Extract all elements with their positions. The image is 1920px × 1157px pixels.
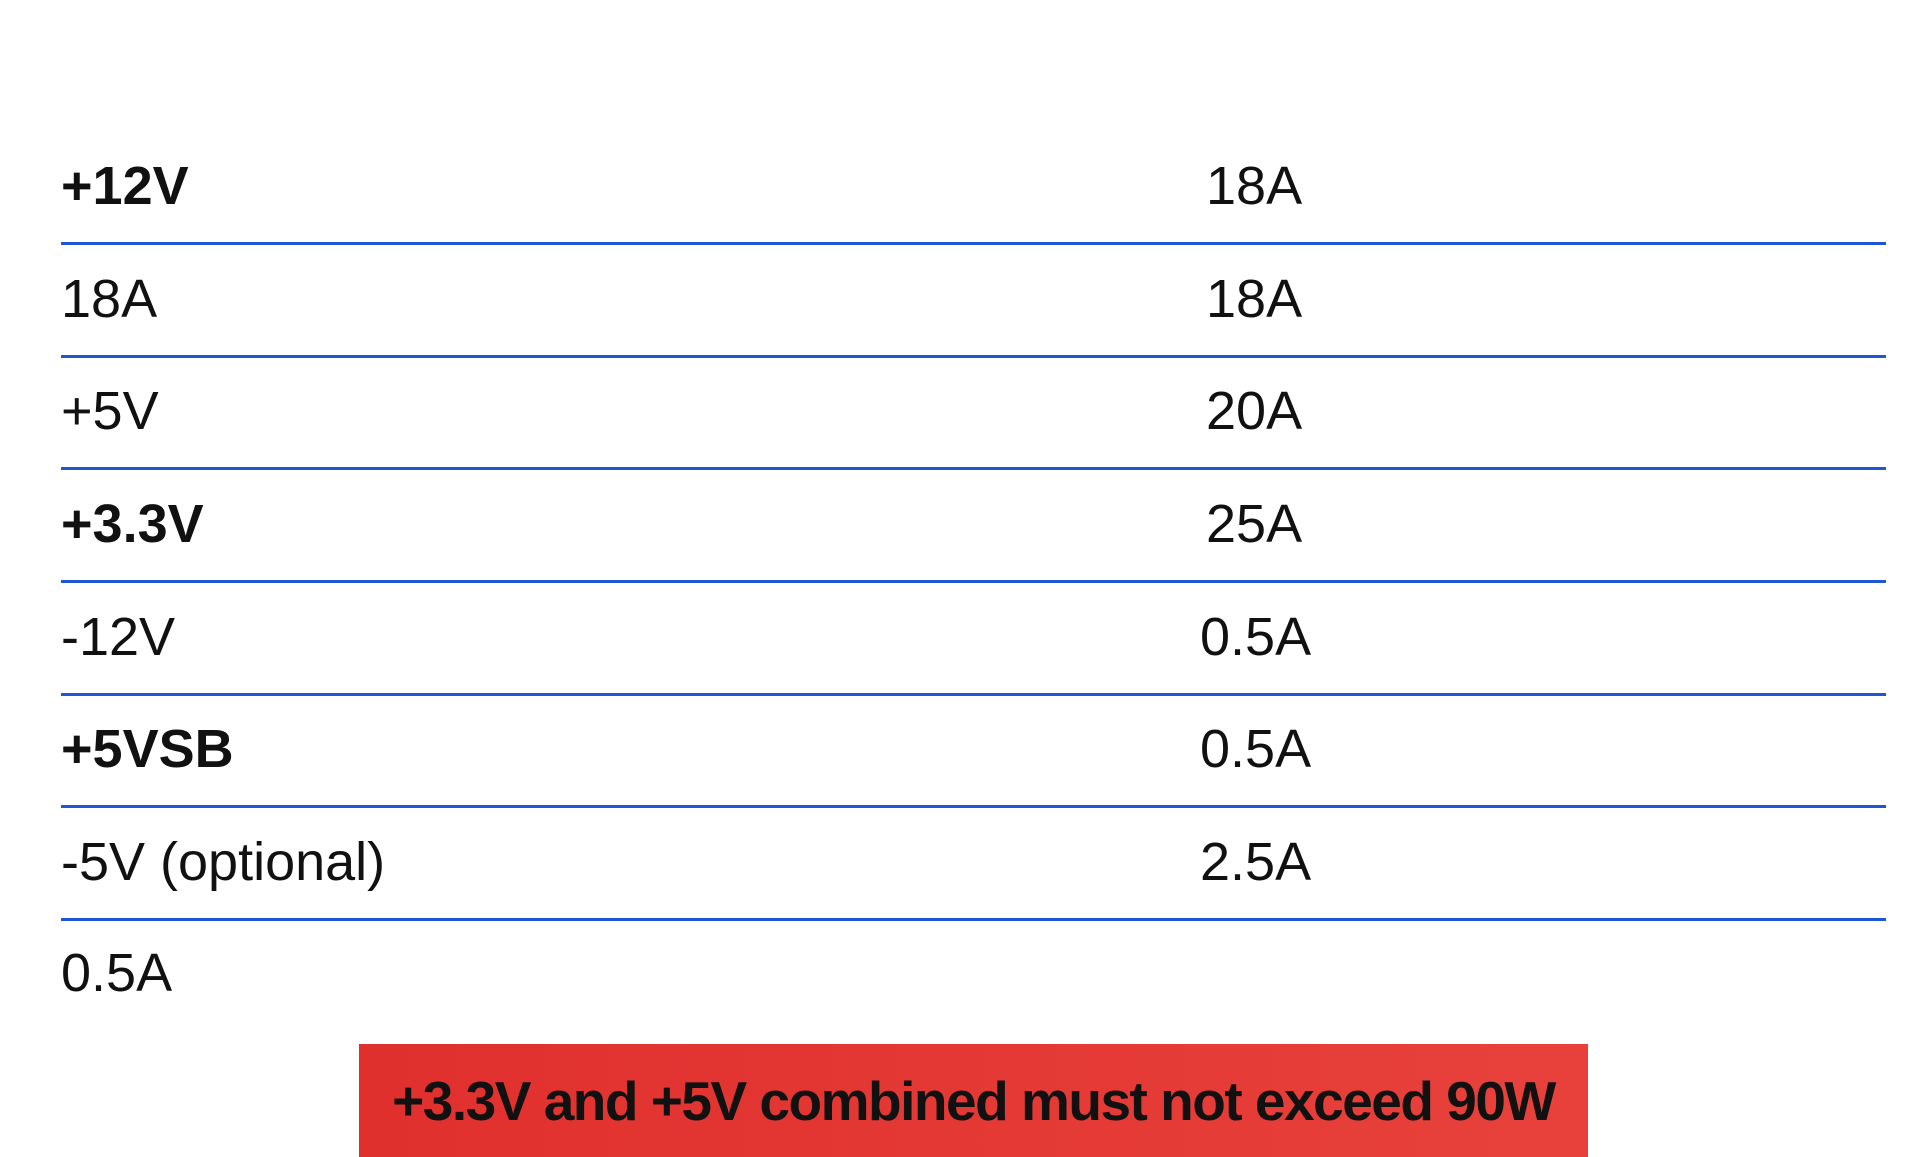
row labels: 20A bbox=[1206, 381, 1302, 441]
row labels: 25A bbox=[1206, 494, 1302, 554]
row: -5V optional: -5V (optional) bbox=[61, 832, 385, 892]
row labels: 18A bbox=[1206, 156, 1302, 216]
row: +5V: +5V bbox=[61, 381, 159, 441]
row: -12V: -12V bbox=[61, 607, 175, 667]
row: +12V: +12V bbox=[61, 156, 189, 216]
row labels: 0.5A bbox=[1200, 607, 1311, 667]
callout: warning banner: +3.3V and +5V combined must not exceed 90W bbox=[392, 1070, 1555, 1132]
row: 18A: 18A bbox=[61, 269, 157, 329]
row labels: 18A bbox=[1206, 269, 1302, 329]
row labels: 2.5A bbox=[1200, 832, 1311, 892]
row labels: 0.5A bbox=[1200, 719, 1311, 779]
row: +3.3V: +3.3V bbox=[61, 494, 204, 554]
row: +5VSB: +5VSB bbox=[61, 719, 234, 779]
row: 0.5A: 0.5A bbox=[61, 943, 172, 1003]
callout: warning banner bbox=[359, 1044, 1588, 1157]
